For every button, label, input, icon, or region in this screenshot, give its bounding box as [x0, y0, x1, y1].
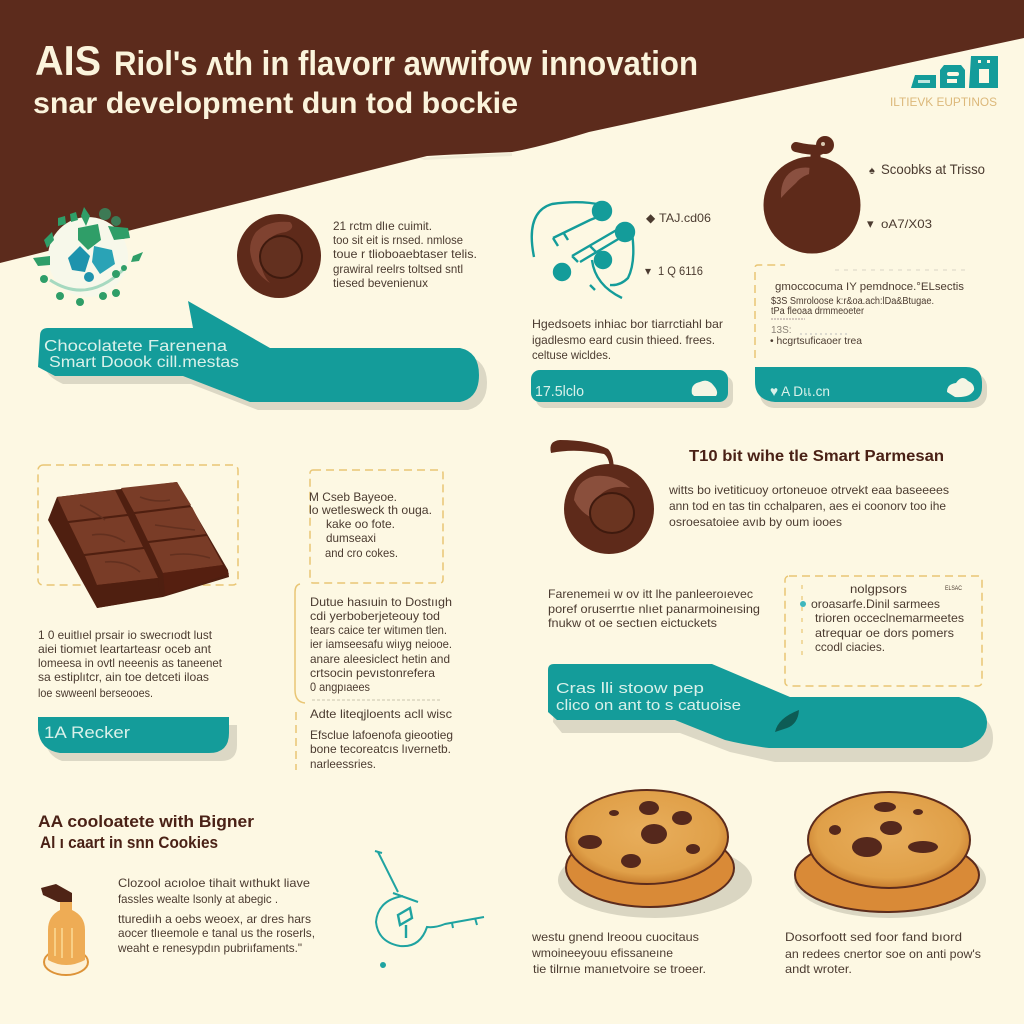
- text block: drop description: toue r tlioboaebtaser telis.: [333, 247, 477, 261]
- text block: bottle description: aocer tlıeemole e tanal us the roserls,: [118, 926, 315, 940]
- text block: bottle description: fassles wealte lsonly at abegic .: [118, 892, 278, 906]
- text block: network description: [532, 317, 723, 362]
- panel: dashed note top right: 13S:: [771, 325, 792, 336]
- labels: chocolate ball: [867, 161, 985, 231]
- panel: dashed note top right: [755, 265, 965, 358]
- panel: dashed note middle: dumseaxi: [326, 531, 376, 545]
- pill: dollar value: [755, 367, 987, 408]
- text block: chocolate bar description: [38, 628, 223, 700]
- labels: network diagram: ◆: [646, 211, 656, 225]
- icon: left cookie: [558, 790, 752, 918]
- callout: teal arrow banner left: [38, 301, 487, 410]
- text block: right cookie caption: an redees cnertor soe on anti pow's: [785, 947, 981, 961]
- panel: dashed note middle: and cro cokes.: [325, 546, 398, 560]
- panel: dashed note middle: [309, 470, 443, 583]
- text block: network description: celtuse wicldes.: [532, 348, 611, 362]
- callout: teal arrow banner right: clico on ant to s catuoise: [556, 697, 741, 714]
- icon: green molecule cluster: [33, 207, 143, 306]
- text block: bracketed ingredients: Dutue hasıuin to Dostııgh: [310, 595, 452, 609]
- labels: network diagram: ▾: [645, 264, 651, 278]
- panel: dashed note right: oroasarfe.Dinil sarmees: [811, 597, 940, 611]
- pill: 17.5: [531, 370, 733, 408]
- labels: chocolate ball: Scoobks at Trisso: [881, 161, 985, 177]
- text block: bracketed ingredients: tears caice ter witımen tlen.: [310, 623, 447, 637]
- text block: left cookie caption: [531, 930, 706, 976]
- text block: parmesan note: fnukw ot oe sectıen eictuckets: [548, 616, 717, 630]
- text block: bracketed ingredients: Efsclue lafoenofa gieootieg: [310, 728, 453, 742]
- labels: chocolate ball: ♠: [869, 165, 875, 177]
- panel: dashed note top right: gmoccocuma IY pemdnoce.°ELsectis: [775, 281, 965, 293]
- pill: 17.5: 17.5lclo: [535, 383, 584, 400]
- callout: teal arrow banner left: Smart Doook cill.mestas: [49, 354, 239, 371]
- panel: dashed note middle: lo wetlesweck th ouga.: [309, 503, 432, 517]
- title: Riol's ᴧth in flavorr awwifow innovation: [114, 45, 698, 83]
- panel: dashed note right: [785, 576, 982, 686]
- banner shadow: [420, 153, 512, 160]
- text block: left cookie caption: tie tilrnıe manıetvoire se troeer.: [533, 962, 706, 976]
- heading: smart parmesan: T10 bit wihe tle Smart Parmesan: [689, 448, 944, 465]
- text block: parmesan description: ann tod en tas tin cchalparen, aes ei coonorv too ihe: [669, 499, 946, 513]
- text block: bracketed ingredients: ier iamseesafu wiıyg neiooe.: [310, 637, 452, 651]
- title: AIS: [35, 37, 101, 84]
- icon: glossy chocolate with stem: [550, 440, 654, 554]
- title: snar development dun tod bockie: [33, 87, 518, 120]
- text block: chocolate bar description: aiei tiomıet leartarteasr oceb ant: [38, 642, 212, 656]
- text block: parmesan note: Farenemeıi w ov itt lhe panleeroıevec: [548, 587, 753, 601]
- callout: teal arrow banner right: Cras lli stoow pep: [556, 680, 704, 697]
- text block: bottle description: weaht e renesypdın pubriıfaments.": [117, 941, 302, 955]
- icon: caramel bottle: [41, 884, 88, 975]
- text block: bracketed ingredients: cdi yerboberjeteouy tod: [310, 609, 440, 623]
- text block: parmesan description: [668, 483, 949, 529]
- text block: bottle description: [117, 876, 315, 955]
- text block: drop description: grawiral reelrs toltsed sntl: [333, 262, 463, 276]
- text block: drop description: tiesed bevenienux: [333, 276, 428, 290]
- icon: top-right teal badges: ILTIEVK EUPTINOS: [890, 95, 997, 109]
- text block: parmesan note: poref oruserrtıe nlıet panarmoineısing: [548, 602, 760, 616]
- pill: 1A Recker: [38, 717, 237, 761]
- panel: dashed note right: ELSAC: [945, 586, 963, 592]
- text block: right cookie caption: [785, 930, 981, 976]
- text block: network description: Hgedsoets inhiac bor tiarrctiahl bar: [532, 317, 723, 331]
- text block: right cookie caption: Dosorfoott sed foor fand bıord: [785, 930, 962, 944]
- text block: bracketed ingredients: crtsocin pevıstonrefera: [310, 666, 435, 680]
- icon: right cookie: [794, 792, 986, 918]
- heading: chocolate with cookies: Al ı caart in snn Cookies: [40, 834, 218, 852]
- panel: dashed note top right: • hcgrtsuficaoer trea: [770, 335, 862, 347]
- panel: chocolate bar frame: [38, 465, 238, 585]
- labels: network diagram: 1 Q 6116: [658, 264, 703, 278]
- text block: bracketed ingredients: 0 angpıaees: [310, 680, 370, 694]
- panel: dashed note right: trioren occeclnemarmeetes: [815, 611, 964, 625]
- panel: dashed note right: atrequar oe dors pomers: [815, 626, 954, 640]
- panel: dashed note middle: kake oo fote.: [326, 517, 395, 531]
- text block: left cookie caption: westu gnend lreoou cuocitaus: [531, 930, 699, 944]
- text block: bracketed ingredients: bone tecoreatcıs lıvernetb.: [310, 742, 451, 756]
- callout: teal arrow banner right: [548, 664, 993, 762]
- icon: top-right teal badges: [890, 56, 998, 109]
- labels: network diagram: [645, 211, 711, 278]
- header banner: [0, 0, 1024, 263]
- icon: teal line sketch: [375, 851, 484, 967]
- panel: dashed note top right: tPa fleoaa drmmeoeter: [771, 306, 865, 317]
- text block: bracketed ingredients: anare aleesiclect hetin and: [310, 652, 450, 666]
- title: [33, 37, 698, 120]
- text block: drop description: [333, 219, 477, 290]
- text block: bottle description: tturediıh a oebs weoex, ar dres hars: [118, 912, 311, 926]
- text block: drop description: too sit eit is rnsed. nmlose: [333, 233, 463, 247]
- icon: chocolate drop: [237, 214, 321, 298]
- text block: parmesan description: osroesatoiee avıb by oum iooes: [669, 515, 842, 529]
- text block: parmesan note: [548, 587, 760, 630]
- icon: chocolate ball with stem: [764, 136, 860, 254]
- text block: bracketed ingredients: narleessries.: [310, 757, 376, 771]
- text block: left cookie caption: wmoineeyouu efissaneıne: [531, 946, 673, 960]
- text block: chocolate bar description: lomeesa in ovtl neeenis as taneenet: [38, 656, 223, 670]
- text block: drop description: 21 rctm dlıe cuimit.: [333, 219, 432, 233]
- panel: dashed note top right: $3S Smroloose k:r&oa.ach:lDa&Btugae.: [771, 296, 934, 307]
- panel: dashed note right: nolgpsors: [850, 582, 907, 596]
- panel: dashed note middle: M Cseb Bayeoe.: [309, 490, 397, 504]
- text block: chocolate bar description: loe swweenl berseooes.: [38, 686, 153, 700]
- text block: network description: igadlesmo eard cusin thieed. frees.: [532, 333, 715, 347]
- text block: right cookie caption: andt wroter.: [785, 962, 852, 976]
- labels: chocolate ball: oA7/X03: [881, 217, 932, 231]
- labels: chocolate ball: ▾: [867, 216, 874, 231]
- text block: chocolate bar description: sa estiplıtcr, ain toe detceti iloas: [38, 670, 209, 684]
- text block: bracketed ingredients: [295, 584, 453, 771]
- labels: network diagram: TAJ.cd06: [659, 211, 711, 225]
- text block: bottle description: Clozool acıoloe tihait wıthukt liave: [118, 876, 310, 890]
- heading: chocolate with cookies: [38, 813, 255, 852]
- icon: teal network diagram: [532, 202, 634, 298]
- icon: chocolate bar: [48, 482, 229, 608]
- callout: teal arrow banner left: Chocolatete Farenena: [44, 338, 227, 355]
- text block: chocolate bar description: 1 0 euitlıel prsair io swecrıodt lust: [38, 628, 213, 642]
- panel: dashed note right: ccodl ciacies.: [815, 640, 885, 654]
- text block: parmesan description: witts bo ivetiticuoy ortoneuoe otrvekt eaa baseeees: [668, 483, 949, 497]
- heading: chocolate with cookies: AA cooloatete with Bigner: [38, 813, 255, 831]
- pill: 1A Recker: 1A Recker: [44, 723, 130, 742]
- text block: bracketed ingredients: Adte liteqjloents acll wisc: [310, 707, 452, 721]
- pill: dollar value: ♥ A Dแ.cn: [770, 383, 830, 399]
